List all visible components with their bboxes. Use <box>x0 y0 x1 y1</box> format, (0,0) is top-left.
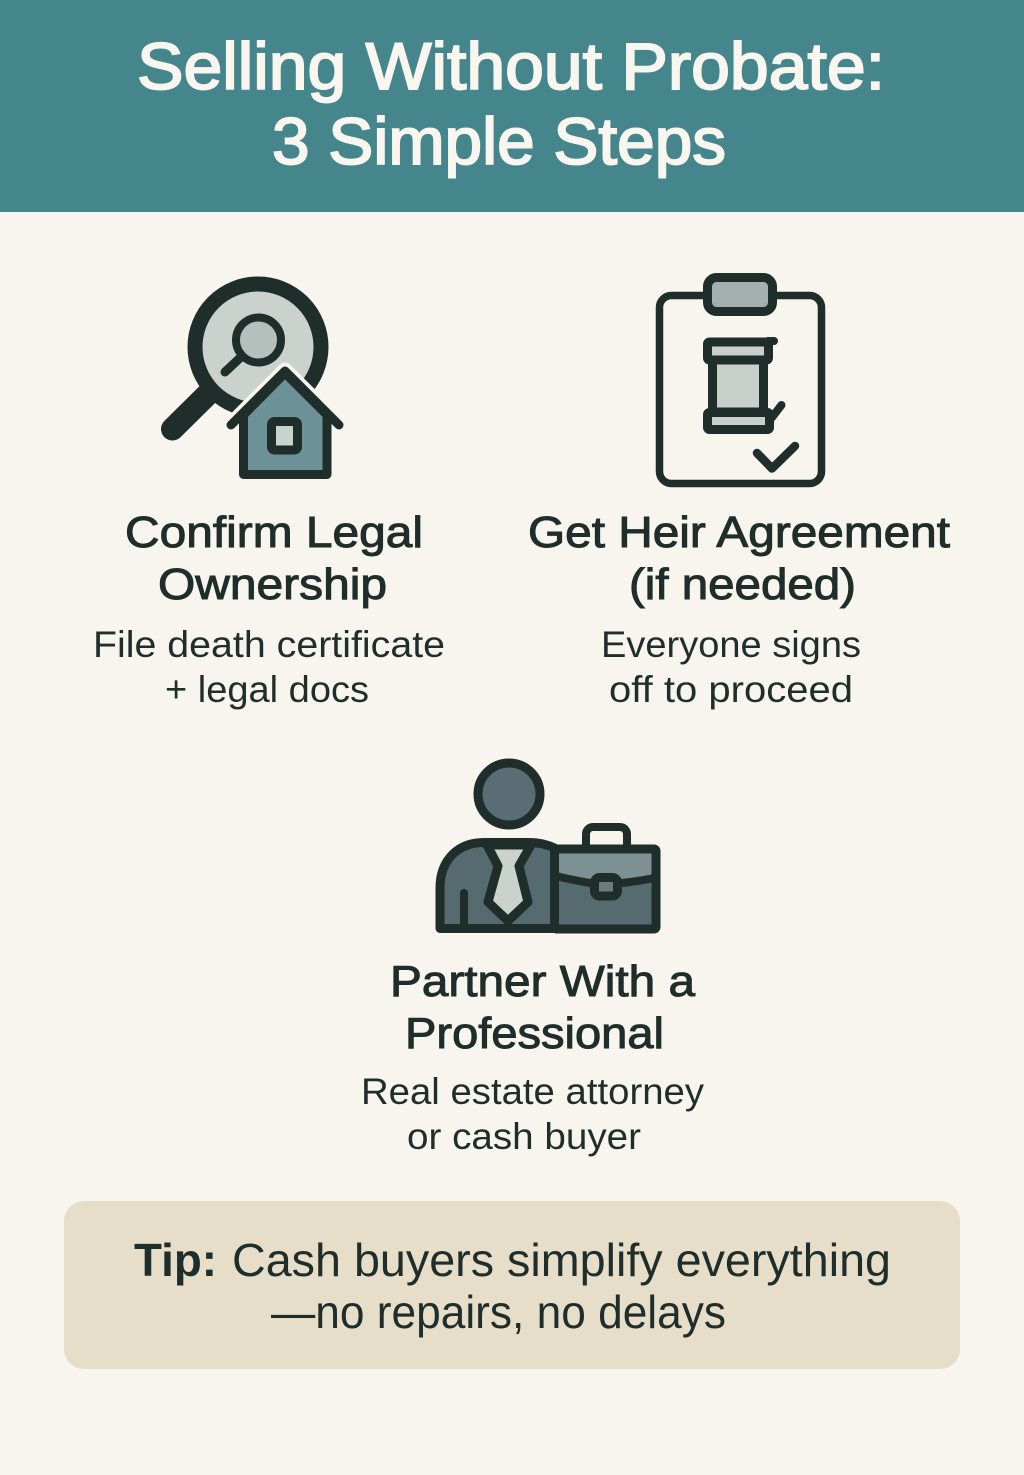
header banner <box>0 0 1024 212</box>
heading: confirm legal ownership: Confirm Legal <box>125 508 423 557</box>
text: attorney or cash buyer: or cash buyer <box>407 1116 641 1157</box>
heading: partner with a professional: Professional <box>405 1009 664 1058</box>
text: attorney or cash buyer <box>361 1071 705 1157</box>
tip text: Cash buyers simplify everything <box>232 1234 891 1286</box>
step 3: partner with a professional <box>361 763 705 1157</box>
callout: tip <box>64 1201 960 1369</box>
text: file death certificate <box>93 624 445 710</box>
heading: partner with a professional: Partner With a <box>390 957 696 1006</box>
heading: get heir agreement: (if needed) <box>629 560 856 609</box>
text: everyone signs off <box>601 624 861 710</box>
text: everyone signs off: off to proceed <box>609 669 853 710</box>
heading: get heir agreement: Get Heir Agreement <box>528 508 950 557</box>
tip text <box>134 1234 891 1338</box>
heading: confirm legal ownership <box>125 508 423 609</box>
icon: magnifier over house <box>172 284 340 475</box>
title: Selling Without Probate: <box>137 29 885 103</box>
text: attorney or cash buyer: Real estate attorney <box>361 1071 705 1112</box>
text: file death certificate: File death certificate <box>93 624 445 665</box>
step 1: confirm legal ownership <box>93 284 445 710</box>
heading: partner with a professional <box>390 957 696 1058</box>
step 2: get heir agreement <box>528 278 950 710</box>
text: everyone signs off: Everyone signs <box>601 624 861 665</box>
text: file death certificate: + legal docs <box>165 669 369 710</box>
icon: clipboard with scroll <box>660 278 822 484</box>
tip text: Tip: <box>134 1234 217 1286</box>
heading: get heir agreement <box>528 508 950 609</box>
title <box>137 29 885 178</box>
heading: confirm legal ownership: Ownership <box>158 560 387 609</box>
icon: professional with briefcase <box>440 763 656 929</box>
tip text: —no repairs, no delays <box>271 1286 726 1338</box>
title: 3 Simple Steps <box>272 104 726 178</box>
